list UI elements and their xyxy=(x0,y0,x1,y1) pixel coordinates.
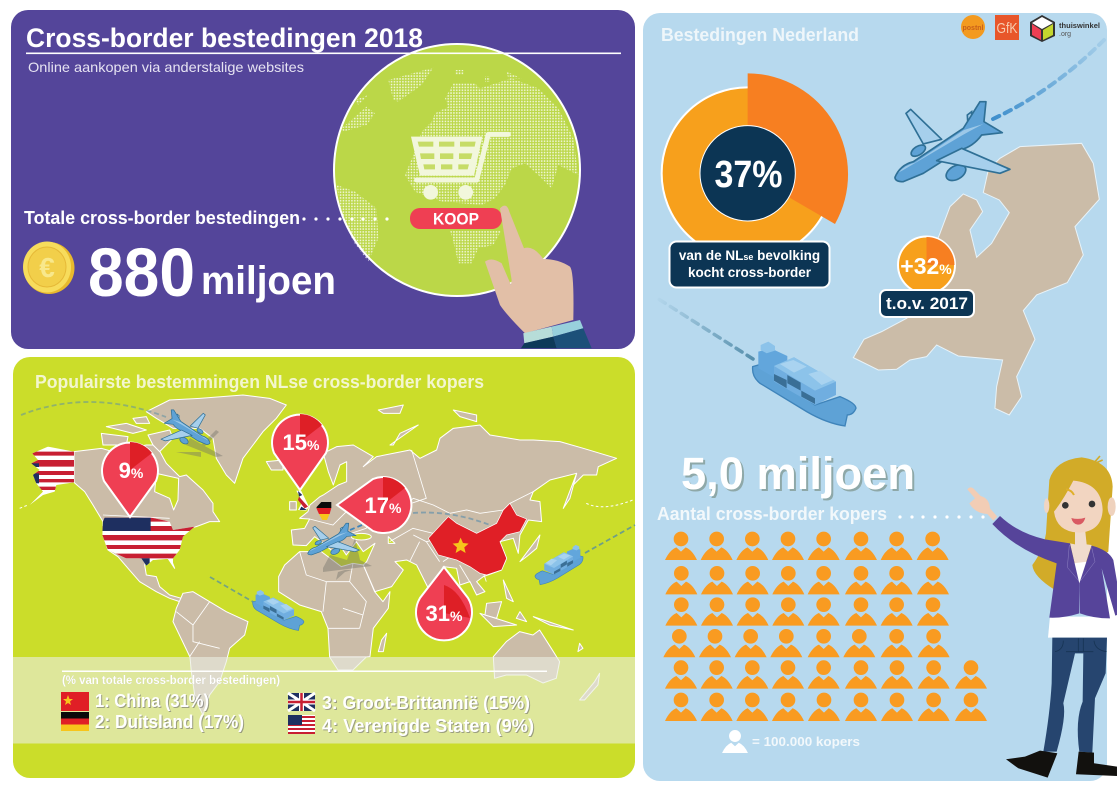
flight route xyxy=(993,37,1107,119)
koop button xyxy=(410,208,502,229)
logo: postnl: postnl xyxy=(962,25,984,32)
heading: Populairste bestemmingen NLse cross-border kopers xyxy=(35,371,484,392)
panel: cross-border spending xyxy=(11,10,635,349)
buyers label: Aantal cross-border kopers xyxy=(657,504,887,524)
comparison box xyxy=(880,290,974,317)
plane xyxy=(895,102,1010,184)
icon: pointing hand xyxy=(485,206,592,348)
pin 9% xyxy=(102,442,158,517)
logos xyxy=(961,15,1100,42)
icon: shopping cart xyxy=(411,134,508,200)
logo: gfk: GfK xyxy=(996,20,1018,37)
pictogram key: = 100.000 kopers xyxy=(752,735,860,749)
title: Cross-border bestedingen 2018 xyxy=(26,23,423,53)
logo text: .org xyxy=(1059,31,1071,38)
amount 880 miljoen xyxy=(88,234,336,311)
amount 880 miljoen: 880 xyxy=(88,234,195,311)
north america outline xyxy=(74,445,220,602)
africa outline xyxy=(279,552,390,670)
total spending label: Totale cross-border bestedingen xyxy=(24,207,300,228)
usa flag xyxy=(102,518,194,566)
logo text: thuiswinkel xyxy=(1059,21,1100,30)
flight and shipping routes xyxy=(21,402,635,603)
country borders xyxy=(103,450,533,657)
pin 17%: 17% xyxy=(365,493,402,518)
aleutian and pacific dots xyxy=(20,500,633,508)
map of the netherlands xyxy=(853,143,1099,415)
legend entries: 2: Duitsland (17%) xyxy=(95,711,244,732)
label box: kocht cross-border xyxy=(688,265,812,280)
legend entries: 1: China (31%) xyxy=(95,690,209,711)
flag: united states xyxy=(288,715,315,734)
subtitle: Online aankopen via anderstalige websites xyxy=(28,59,304,75)
amount 880 miljoen: miljoen xyxy=(201,259,336,303)
donut chart 37% xyxy=(662,73,848,259)
islands xyxy=(266,460,283,470)
pin 9%: 9% xyxy=(119,458,144,483)
uk flag shape xyxy=(296,491,309,511)
flag: china xyxy=(61,692,89,711)
value 37%: 37% xyxy=(714,154,782,196)
flag: united kingdom xyxy=(288,693,315,711)
legend caption: (% van totale cross-border bestedingen) xyxy=(62,675,280,687)
eurasia outline xyxy=(291,425,617,595)
person pictogram grid xyxy=(663,532,987,721)
comparison box: t.o.v. 2017 xyxy=(886,294,968,313)
ship atlantic xyxy=(253,590,304,630)
pin 31%: 31% xyxy=(426,601,463,626)
legend entries xyxy=(95,690,534,736)
heading: Bestedingen Nederland xyxy=(661,24,859,45)
growth badge +32%: +32% xyxy=(900,253,952,279)
legend entries: 3: Groot-Brittannië (15%) xyxy=(322,692,530,713)
ship xyxy=(753,342,856,426)
growth badge +32% xyxy=(898,236,955,294)
china xyxy=(428,503,527,575)
germany flag shape xyxy=(316,502,331,520)
dotted leader xyxy=(302,217,389,221)
pin 15% xyxy=(272,414,328,490)
plane over canada xyxy=(161,410,210,445)
globe with dotted continents xyxy=(334,44,580,296)
panel: spending netherlands xyxy=(643,13,1107,781)
legend xyxy=(13,657,635,744)
logo text xyxy=(1059,21,1100,38)
flag: germany xyxy=(61,712,89,731)
woman pointing xyxy=(967,456,1117,778)
icon: euro coin: € xyxy=(39,252,55,283)
south america outline xyxy=(173,592,248,715)
pin 17% xyxy=(337,477,411,533)
pin 31% xyxy=(416,567,472,640)
icon: euro coin xyxy=(23,242,74,294)
big number 5,0 miljoen: 5,0 miljoen xyxy=(681,448,915,499)
plane over europe xyxy=(308,523,360,556)
label box: van de NLse bevolking xyxy=(679,248,820,263)
plane shadows xyxy=(176,430,372,580)
ship pacific xyxy=(535,545,583,585)
alaska flag xyxy=(30,446,74,505)
ship route xyxy=(657,298,753,359)
world map xyxy=(20,395,633,715)
koop button: KOOP xyxy=(433,210,479,228)
dotted leader xyxy=(898,515,985,519)
pin 15%: 15% xyxy=(283,430,320,455)
label box xyxy=(670,242,830,288)
australia outline xyxy=(493,630,560,683)
pictogram key xyxy=(722,730,860,753)
legend entries: 4: Verenigde Staten (9%) xyxy=(322,715,534,736)
logo: thuiswinkel cube xyxy=(1030,15,1055,42)
panel: popular destinations xyxy=(13,357,635,778)
